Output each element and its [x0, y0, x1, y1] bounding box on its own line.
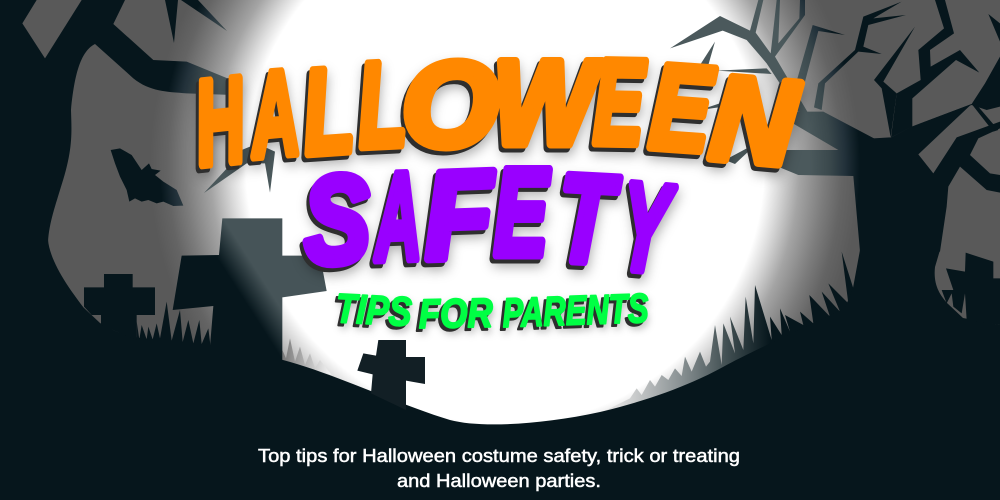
right grave cross	[942, 253, 1000, 325]
subtitle: Tips for Parents: FOR	[418, 290, 493, 337]
upper twig	[165, 0, 227, 43]
ground	[0, 210, 1000, 500]
subtitle: Tips for Parents	[335, 285, 649, 337]
small grave cross left	[84, 274, 155, 340]
subtitle: Tips for Parents: TIPS	[335, 285, 413, 335]
large tilted grave cross	[173, 218, 327, 362]
title: HALLOWEEN: H	[189, 52, 252, 191]
bottom grave cross	[357, 340, 425, 410]
crossing twig	[972, 104, 998, 132]
right upper branches	[891, 0, 979, 137]
subtitle: Tips for Parents: PARENTS	[502, 285, 649, 336]
description text	[258, 445, 740, 491]
title: HALLOWEEN: L	[354, 37, 409, 173]
title: HALLOWEEN: W	[493, 36, 603, 170]
title: SAFETY: S	[300, 150, 373, 291]
description text: and Halloween parties.	[397, 470, 601, 491]
title: HALLOWEEN: E	[646, 39, 718, 177]
middle twigs	[700, 42, 772, 110]
lower twigs	[204, 143, 275, 193]
title: HALLOWEEN	[189, 35, 803, 191]
title: SAFETY: T	[555, 149, 622, 290]
left tree trunk and branch	[0, 0, 233, 307]
main branch	[725, 112, 903, 200]
title: HALLOWEEN: A	[243, 45, 304, 183]
title: SAFETY: Y	[616, 157, 679, 299]
title: SAFETY: A	[371, 147, 423, 287]
title: HALLOWEEN: L	[298, 43, 358, 180]
left tree	[0, 0, 275, 307]
branch with forked tips	[796, 2, 906, 110]
trunk	[853, 104, 1000, 252]
title: HALLOWEEN: O	[402, 38, 498, 172]
right tree	[670, 0, 1000, 252]
grass near bottom cross	[282, 338, 332, 375]
title: SAFETY: E	[494, 144, 550, 282]
icon: bat	[111, 148, 183, 206]
tall spike	[874, 27, 915, 137]
grass between graves	[137, 302, 211, 347]
gray gap in tree	[22, 0, 82, 58]
grass on the right	[600, 252, 860, 413]
upper left branches	[670, 0, 808, 113]
title: SAFETY: F	[422, 146, 498, 286]
description text: Top tips for Halloween costume safety, trick or treating	[258, 445, 740, 466]
title: HALLOWEEN: E	[593, 35, 647, 170]
far right band	[912, 14, 1000, 127]
title: SAFETY	[300, 144, 679, 299]
graves and left grass	[84, 218, 425, 410]
title: HALLOWEEN: N	[706, 50, 803, 191]
